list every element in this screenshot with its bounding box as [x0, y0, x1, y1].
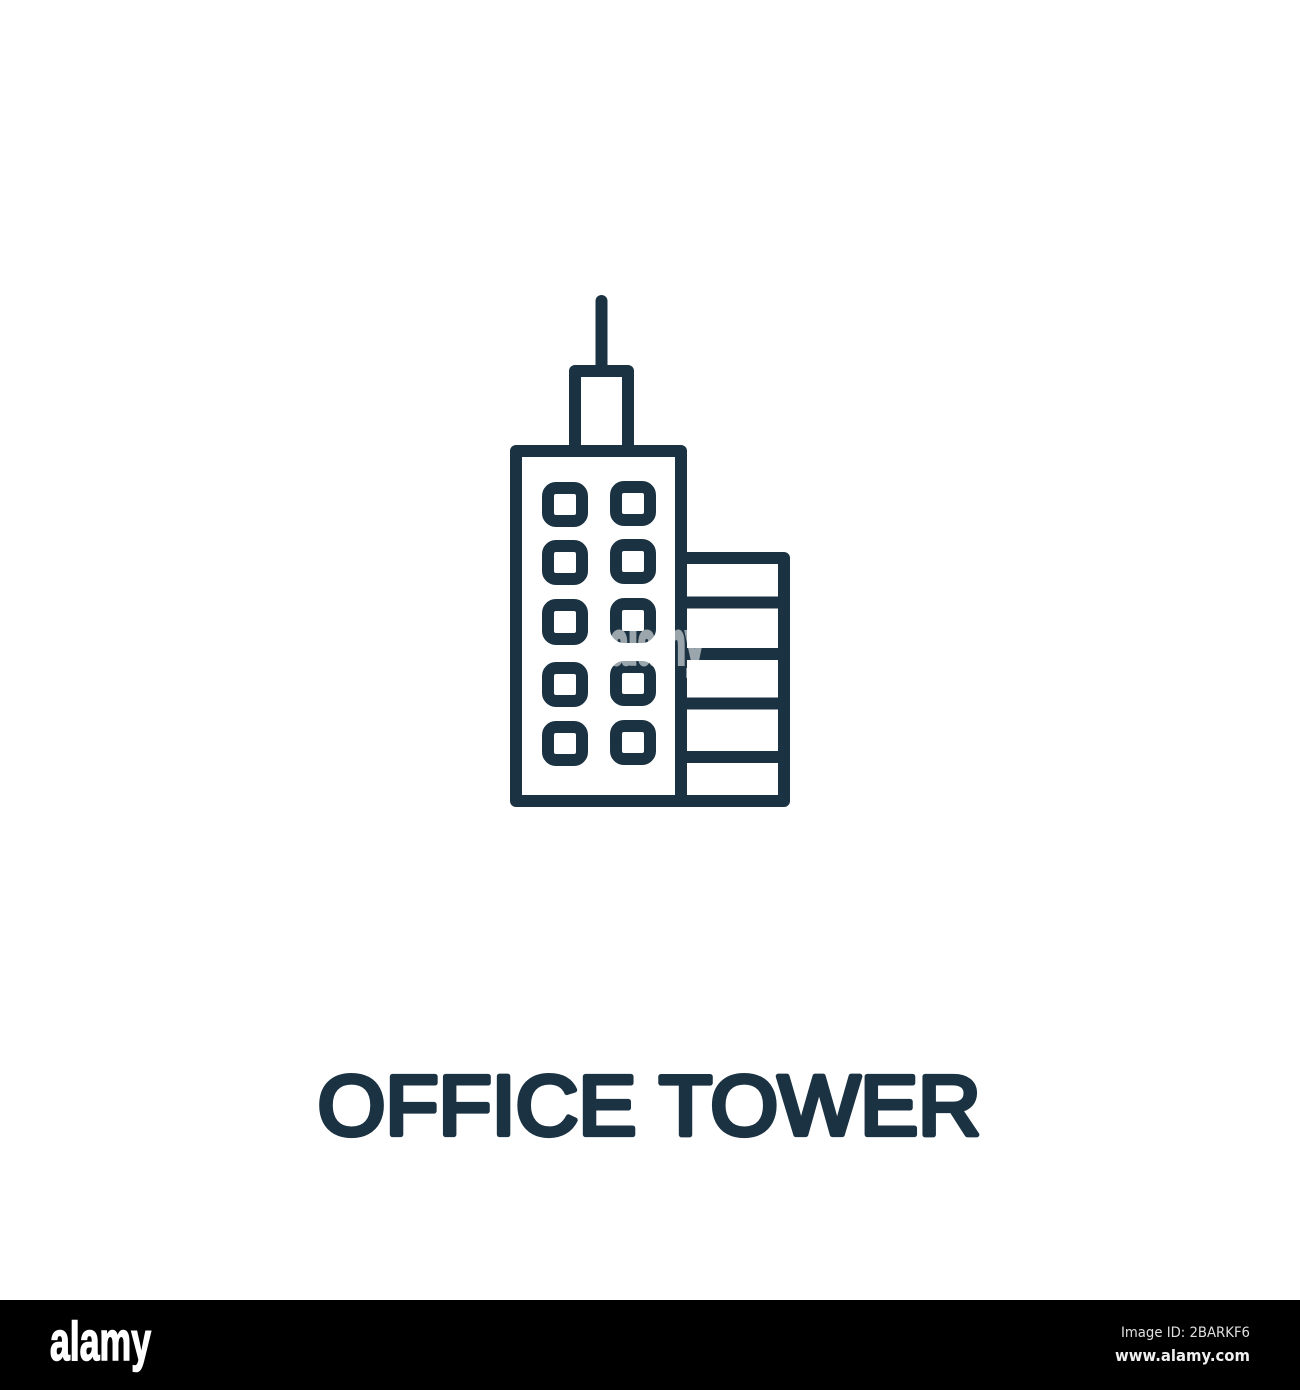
- main tower body: [516, 451, 681, 801]
- watermark: alamy: [610, 610, 704, 677]
- antenna: [596, 301, 608, 371]
- side building floors: [681, 602, 784, 757]
- title: OFFICE TOWER: [318, 1058, 981, 1152]
- website: www.alamy.com: [1115, 1346, 1250, 1365]
- windows left column: [548, 488, 582, 760]
- upper tower section: [575, 371, 628, 451]
- footer bar: [0, 1300, 1300, 1390]
- windows right column: [616, 487, 650, 759]
- footer logo: alamy: [50, 1310, 151, 1372]
- side building: [681, 558, 784, 801]
- icon: office tower: [516, 301, 784, 801]
- image id: Image ID: 2BARKF6: [1121, 1325, 1250, 1341]
